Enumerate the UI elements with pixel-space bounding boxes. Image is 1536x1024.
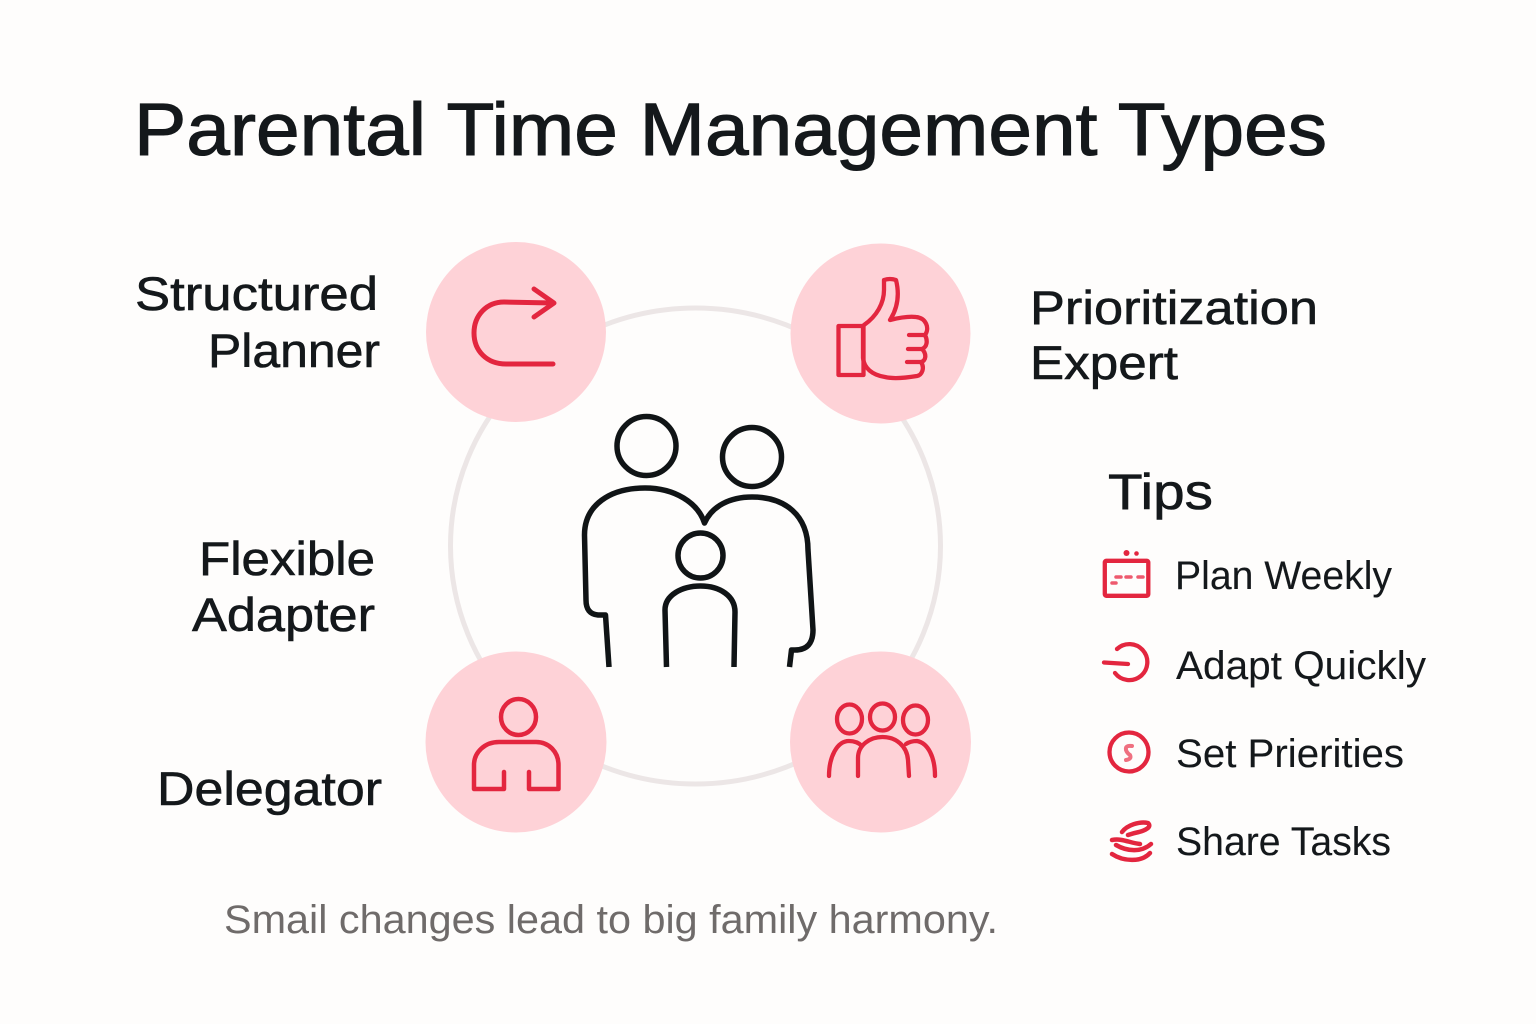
icon: exit circle (1104, 644, 1147, 680)
pink circle (790, 652, 971, 832)
label: delegator: Delegator (157, 762, 382, 815)
panel: prioritization expert (790, 244, 1318, 424)
icon: return arrow (474, 289, 554, 364)
label: flexible adapter: Flexible (199, 532, 375, 585)
panel: structured planner (135, 242, 606, 422)
pink circle (426, 242, 606, 422)
panel: delegator (157, 652, 606, 832)
tip: share tasks: Share Tasks (1176, 820, 1391, 864)
icon: person (474, 699, 558, 789)
footer tagline: Smail changes lead to big family harmony. (224, 898, 998, 942)
label: prioritization expert (1030, 281, 1318, 389)
heading: tips: Tips (1108, 464, 1213, 520)
label: structured planner (135, 267, 380, 377)
icon: family (584, 416, 813, 667)
panel: team (790, 652, 971, 832)
central diagram (450, 308, 940, 784)
icon: calendar (1105, 550, 1148, 596)
tips panel (1104, 464, 1426, 864)
label: prioritization expert: Prioritization (1030, 281, 1318, 334)
pink circle (426, 652, 606, 832)
icon: stacked swooshes (1112, 822, 1151, 860)
pink circle (790, 244, 970, 424)
tip: adapt quickly: Adapt Quickly (1176, 644, 1426, 688)
icon: thumbs up (838, 279, 927, 378)
connecting ring (450, 308, 940, 784)
label: structured planner: Structured (135, 267, 378, 320)
title: Parental Time Management Types (134, 88, 1327, 171)
tip: set priorities: Set Prierities (1176, 732, 1404, 776)
label: prioritization expert: Expert (1030, 336, 1178, 389)
label: structured planner: Planner (208, 324, 380, 377)
label: flexible adapter (192, 532, 375, 641)
tip: plan weekly (1105, 550, 1392, 598)
label: flexible adapter: Adapter (192, 588, 375, 641)
tip: plan weekly: Plan Weekly (1175, 554, 1392, 598)
icon: group of three (829, 704, 935, 776)
icon: coin (1110, 732, 1148, 772)
